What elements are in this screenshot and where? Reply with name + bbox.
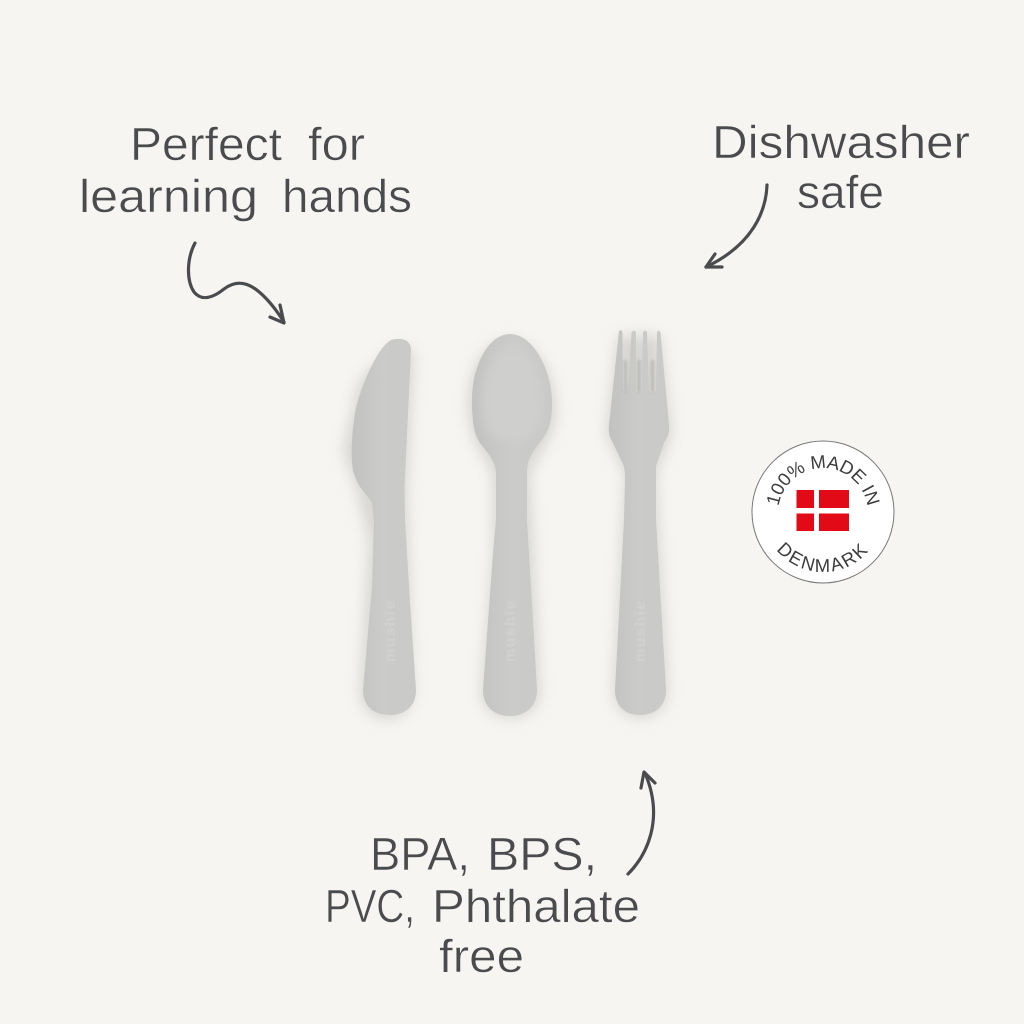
caption: BPA, BPS, PVC, Phthalate free: BPS, — [487, 828, 597, 880]
knife — [343, 339, 416, 719]
caption: dishwasher safe: safe — [797, 166, 884, 218]
caption: perfect for learning hands: Perfect — [130, 118, 282, 170]
caption: BPA, BPS, PVC, Phthalate free: Phthalate — [432, 880, 640, 932]
badge bottom text: DENMARK — [777, 542, 868, 572]
caption: perfect for learning hands: learning — [79, 170, 258, 222]
caption: dishwasher safe: Dishwasher — [712, 116, 970, 168]
fork — [606, 330, 672, 718]
arrow: from dishwasher caption to fork — [706, 185, 767, 267]
embossed brand on spoon: mushie — [502, 600, 519, 662]
caption: perfect for learning hands: for — [308, 118, 365, 170]
icon: Danish flag — [796, 490, 849, 531]
embossed brand on knife: mushie — [382, 600, 399, 662]
embossed brand on fork: mushie — [632, 600, 649, 662]
caption: perfect for learning hands — [79, 118, 412, 222]
caption: BPA, BPS, PVC, Phthalate free: PVC, — [325, 880, 415, 932]
badge: 100% made in Denmark — [752, 440, 894, 584]
caption: perfect for learning hands: hands — [282, 170, 412, 222]
caption: dishwasher safe — [712, 116, 970, 218]
caption: BPA, BPS, PVC, Phthalate free: free — [439, 930, 524, 982]
caption: BPA, BPS, PVC, Phthalate free: BPA, — [370, 828, 470, 880]
arrow: from BPA free caption up to fork — [628, 772, 655, 874]
caption: BPA, BPS, PVC, Phthalate free — [325, 828, 640, 982]
badge top text: 100% MADE IN — [767, 455, 880, 505]
spoon — [468, 334, 556, 718]
arrow: curved from learning hands caption to knife — [188, 243, 284, 323]
